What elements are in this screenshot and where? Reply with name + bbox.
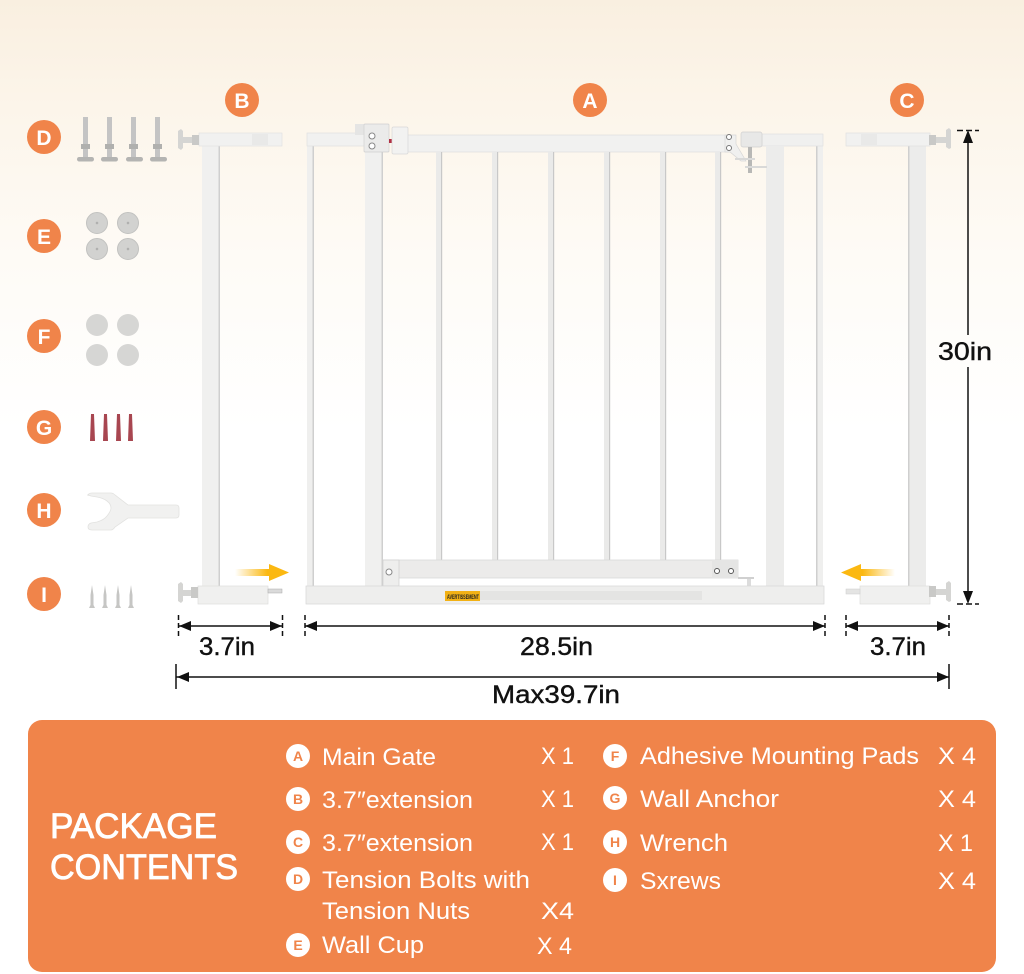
badge: C [890, 83, 924, 117]
dimension: 28.5in: 28.5in [520, 633, 593, 661]
item F: Adhesive Mounting Pads [640, 743, 919, 770]
warning label: AVERTISSEMENT [447, 594, 479, 601]
item G: Wall Anchor [640, 786, 779, 813]
item D: D [293, 871, 303, 887]
badge: D: D [36, 127, 52, 150]
badge: I [27, 577, 61, 611]
badge: E: E [37, 226, 51, 249]
warning label [445, 591, 480, 601]
top lock left [355, 124, 408, 154]
arrow: yellow right [235, 564, 289, 581]
badge: I: I [41, 584, 47, 607]
badge: D [27, 120, 61, 154]
item I: I [613, 872, 617, 888]
heading [50, 807, 238, 887]
badge: F: F [38, 326, 51, 349]
item E: E [293, 937, 303, 953]
item D: X4 [541, 898, 574, 925]
heading: CONTENTS [50, 848, 238, 887]
item A: X 1 [541, 743, 574, 770]
item G: G [610, 790, 621, 806]
item B: 3.7″extension [322, 787, 473, 814]
dimension: max 39.7in: Max39.7in [492, 681, 620, 709]
item H: Wrench [640, 830, 728, 857]
icon: screws [89, 585, 134, 608]
item G: X 4 [938, 786, 976, 813]
icon: wrench [88, 493, 179, 530]
dimension: 30in: 30in [938, 338, 992, 366]
item H [603, 830, 973, 857]
background [0, 0, 1024, 430]
latch right [726, 132, 767, 173]
dimension: max 39.7in [176, 664, 949, 709]
dimension: 3.7in right [846, 615, 949, 661]
item C: X 1 [541, 829, 574, 856]
item H: H [610, 834, 620, 850]
badge: G [27, 410, 61, 444]
badge: A [573, 83, 607, 117]
item D [286, 867, 574, 925]
item B: B [293, 791, 303, 807]
item C: C [293, 834, 303, 850]
dimension: 3.7in left [178, 615, 282, 661]
item H: X 1 [938, 830, 973, 857]
badge: A: A [582, 90, 598, 113]
item C [286, 829, 574, 857]
badge: G: G [36, 417, 52, 440]
icon: adhesive pads [86, 314, 139, 366]
icon: wall anchors [90, 414, 133, 441]
item F: X 4 [938, 743, 976, 770]
dimension: 30in [938, 130, 992, 604]
icon: wall cups [86, 212, 138, 260]
bottom cross bar [383, 560, 754, 586]
item A [286, 743, 574, 771]
item A: A [293, 748, 303, 764]
dimension: 3.7in right: 3.7in [870, 633, 926, 661]
icon: tension bolts [77, 117, 167, 162]
dimension: 3.7in left: 3.7in [199, 633, 255, 661]
item I: Sxrews [640, 868, 721, 895]
main gate A [306, 124, 824, 604]
extension B [178, 129, 282, 604]
badge: B: B [234, 90, 250, 113]
badge: C: C [899, 90, 915, 113]
item G [603, 786, 976, 813]
arrow: yellow left [841, 564, 895, 581]
item A: Main Gate [322, 744, 436, 771]
badge: H: H [36, 500, 52, 523]
item I [603, 868, 976, 895]
badge: B [225, 83, 259, 117]
badge: H [27, 493, 61, 527]
item E: Wall Cup [322, 932, 424, 959]
item B: X 1 [541, 786, 574, 813]
base bar [306, 586, 824, 604]
item F: F [611, 748, 620, 764]
item C: 3.7″extension [322, 830, 473, 857]
item E: X 4 [537, 933, 572, 960]
heading: PACKAGE [50, 807, 217, 846]
item D: Tension Nuts [322, 898, 470, 925]
item I: X 4 [938, 868, 976, 895]
item D: Tension Bolts with [322, 867, 530, 894]
badge: F [27, 319, 61, 353]
badge: E [27, 219, 61, 253]
item E [286, 932, 572, 960]
dimension: 28.5in [305, 615, 825, 661]
item B [286, 786, 574, 814]
extension C [846, 128, 951, 604]
panel: package contents [28, 720, 996, 972]
